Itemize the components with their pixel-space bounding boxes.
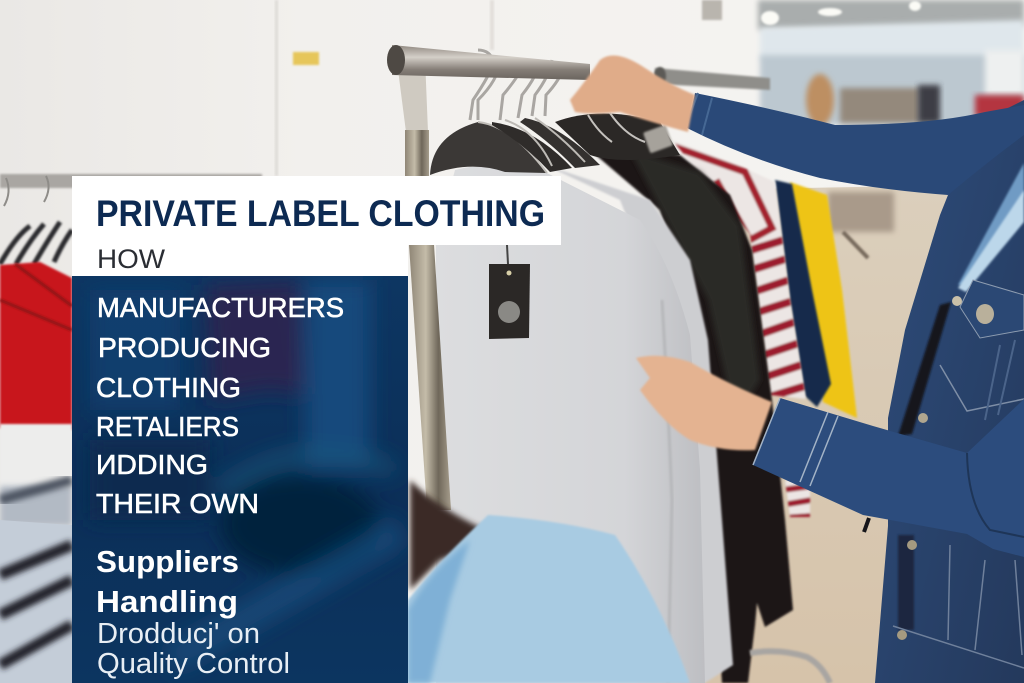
text block: uppercase list: PRODUCING	[98, 332, 271, 363]
black garment	[590, 150, 793, 683]
text block: suppliers: Handling	[96, 584, 238, 619]
text block: how: HOW	[97, 244, 166, 274]
person: jacket and arms	[685, 93, 1024, 683]
panel: navy text panel	[72, 276, 408, 683]
text block: uppercase list	[96, 292, 344, 519]
text block: suppliers: Suppliers	[96, 544, 239, 579]
yellow garment	[790, 182, 857, 418]
icon: upper hand	[570, 56, 695, 132]
second grey shirt	[545, 165, 733, 683]
text block: uppercase list: THEIR OWN	[96, 488, 259, 519]
text block: uppercase list: CLOTHING	[96, 372, 241, 403]
zipper pull	[864, 518, 869, 532]
lower sleeve	[753, 398, 1024, 557]
text block: uppercase list: ИDDING	[96, 449, 208, 480]
title: PRIVATE LABEL CLOTHING	[96, 193, 545, 234]
icon: lower hand	[636, 356, 772, 450]
navy garment	[775, 180, 831, 407]
panel: clothing on main rack	[436, 130, 857, 683]
rack post	[397, 58, 451, 510]
front white shirt	[436, 165, 705, 683]
text block: suppliers	[96, 544, 239, 619]
rack foot	[750, 651, 830, 683]
text block: uppercase list: MANUFACTURERS	[97, 292, 344, 323]
top rail	[387, 45, 770, 90]
text block: production and quality: Quality Control	[97, 648, 290, 680]
text block: production and quality	[97, 618, 290, 680]
panel: left clothing rack	[0, 174, 262, 683]
hang tag	[489, 245, 530, 339]
foreground shirt on hanger	[408, 480, 690, 683]
striped garment	[674, 142, 812, 519]
text block: uppercase list: RETALIERS	[96, 411, 239, 442]
panel: white title banner	[72, 176, 561, 276]
text block: production and quality: Drodducj' on	[97, 618, 260, 650]
jacket body	[875, 100, 1024, 683]
hangers	[430, 50, 680, 175]
upper sleeve	[687, 93, 1024, 195]
